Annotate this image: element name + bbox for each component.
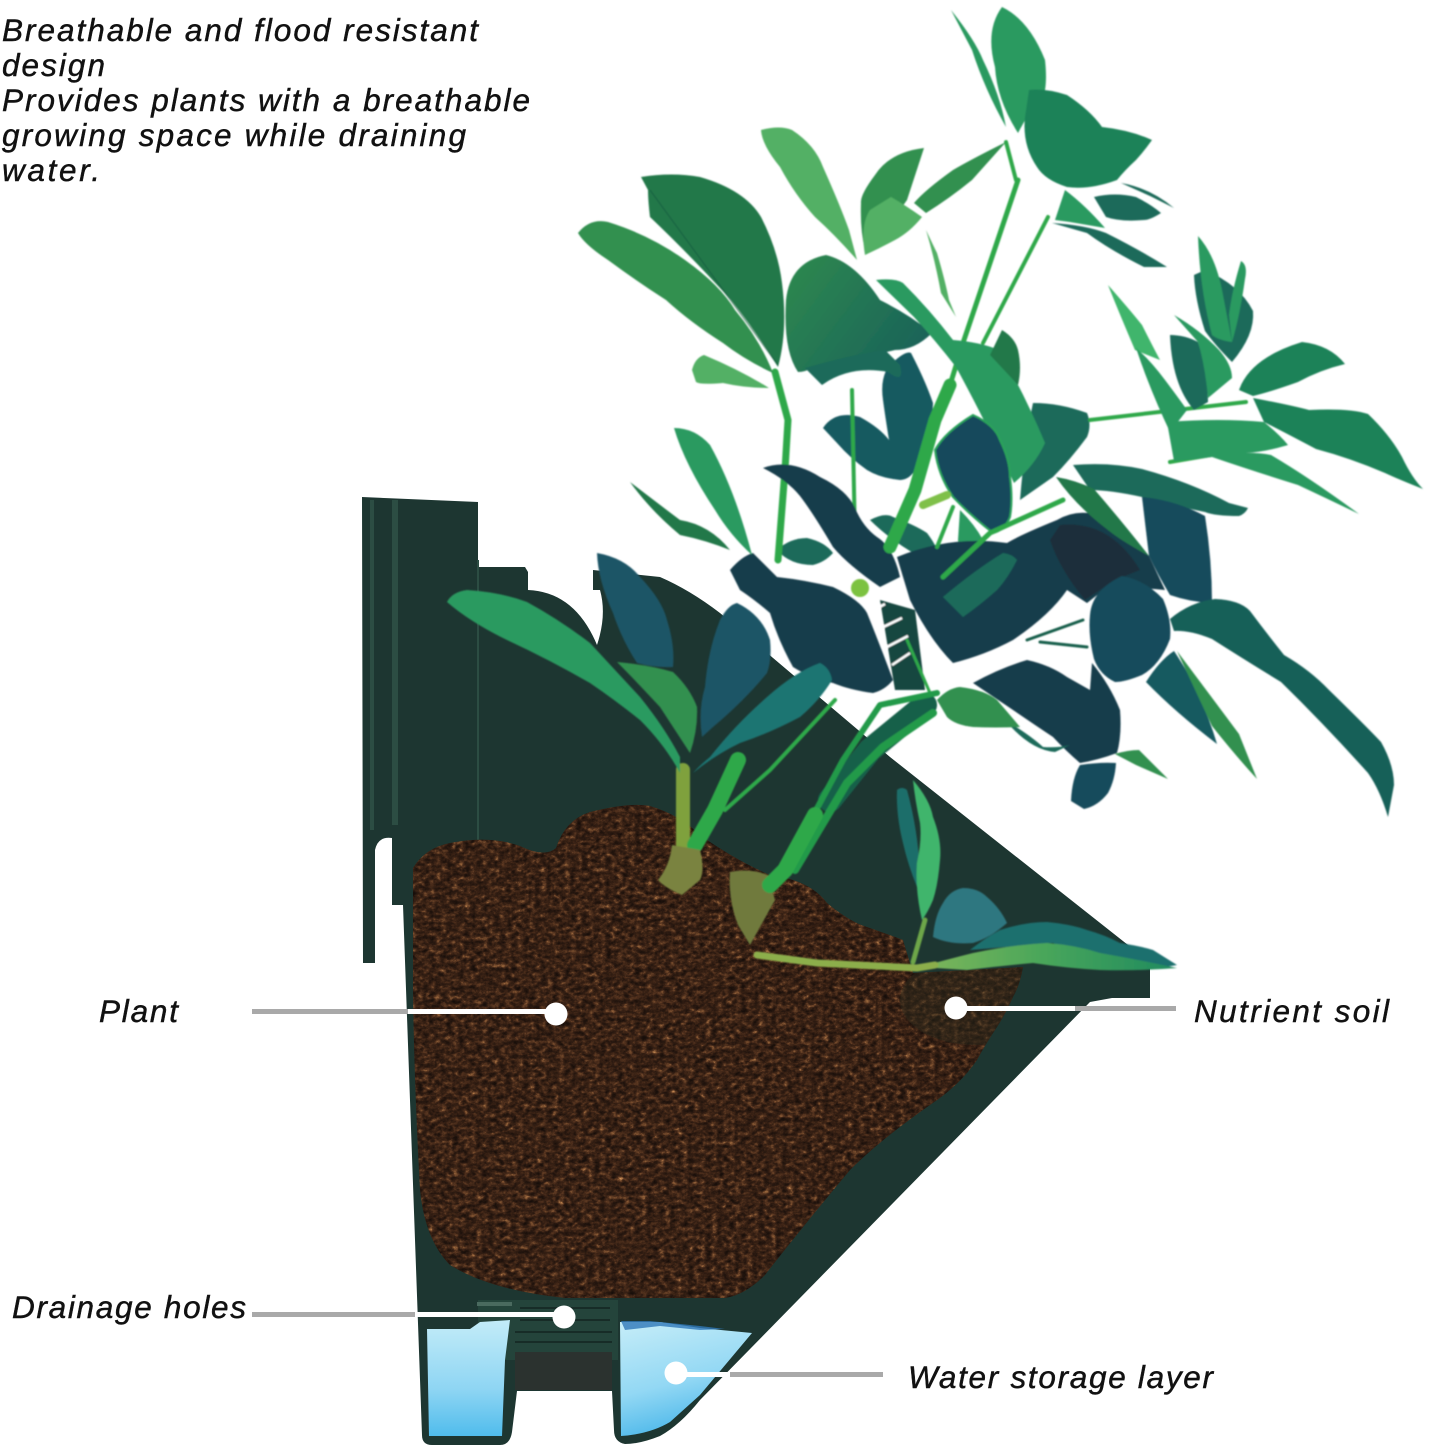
lower-left shoot leaves bbox=[447, 553, 832, 773]
navy heart leaf bbox=[935, 415, 1012, 533]
navy pointed and lobed centre leaves bbox=[730, 465, 900, 693]
water storage: left chamber bbox=[427, 1320, 510, 1436]
callout: drainage holes: Drainage holes bbox=[12, 1289, 246, 1325]
low side shoot bbox=[757, 780, 1177, 970]
callout: water storage layer: Water storage layer bbox=[908, 1359, 1214, 1395]
lower plant stems and roots bbox=[658, 760, 815, 945]
right lower cluster bbox=[1056, 464, 1394, 817]
callout: nutrient soil bbox=[944, 993, 1390, 1029]
planter body cross-section bbox=[362, 497, 1150, 1445]
stem and spacer bars behind lobed leaf bbox=[870, 600, 925, 690]
planter slot highlights bbox=[370, 500, 479, 850]
right-hand branch leaves bbox=[1108, 236, 1437, 514]
callout: plant: Plant bbox=[99, 993, 179, 1029]
plant stems bbox=[775, 142, 1246, 647]
lower centre leaves bbox=[937, 660, 1168, 809]
heading: product description: Breathable and flood resistant bbox=[2, 12, 479, 48]
heading: product description: Provides plants with a breathable bbox=[2, 82, 530, 118]
main branch stems bbox=[725, 385, 1063, 880]
dark central mass bbox=[897, 513, 1165, 663]
callout: nutrient soil: Nutrient soil bbox=[1194, 993, 1390, 1029]
upper leaves bbox=[578, 7, 1174, 555]
heading: product description: growing space while draining bbox=[2, 117, 466, 153]
callout: drainage holes bbox=[12, 1289, 576, 1328]
heading: product description: water. bbox=[2, 152, 100, 188]
plant bbox=[447, 7, 1437, 970]
heading: product description: design bbox=[2, 47, 105, 83]
callout: plant bbox=[99, 993, 568, 1029]
callout: water storage layer bbox=[664, 1359, 1214, 1395]
water storage: right chamber bbox=[620, 1321, 752, 1436]
soil bbox=[400, 795, 1050, 1305]
back leaves behind branches bbox=[777, 255, 1165, 663]
chamber inner walls and drainage grid bbox=[477, 1300, 618, 1390]
heading: product description bbox=[2, 12, 530, 188]
